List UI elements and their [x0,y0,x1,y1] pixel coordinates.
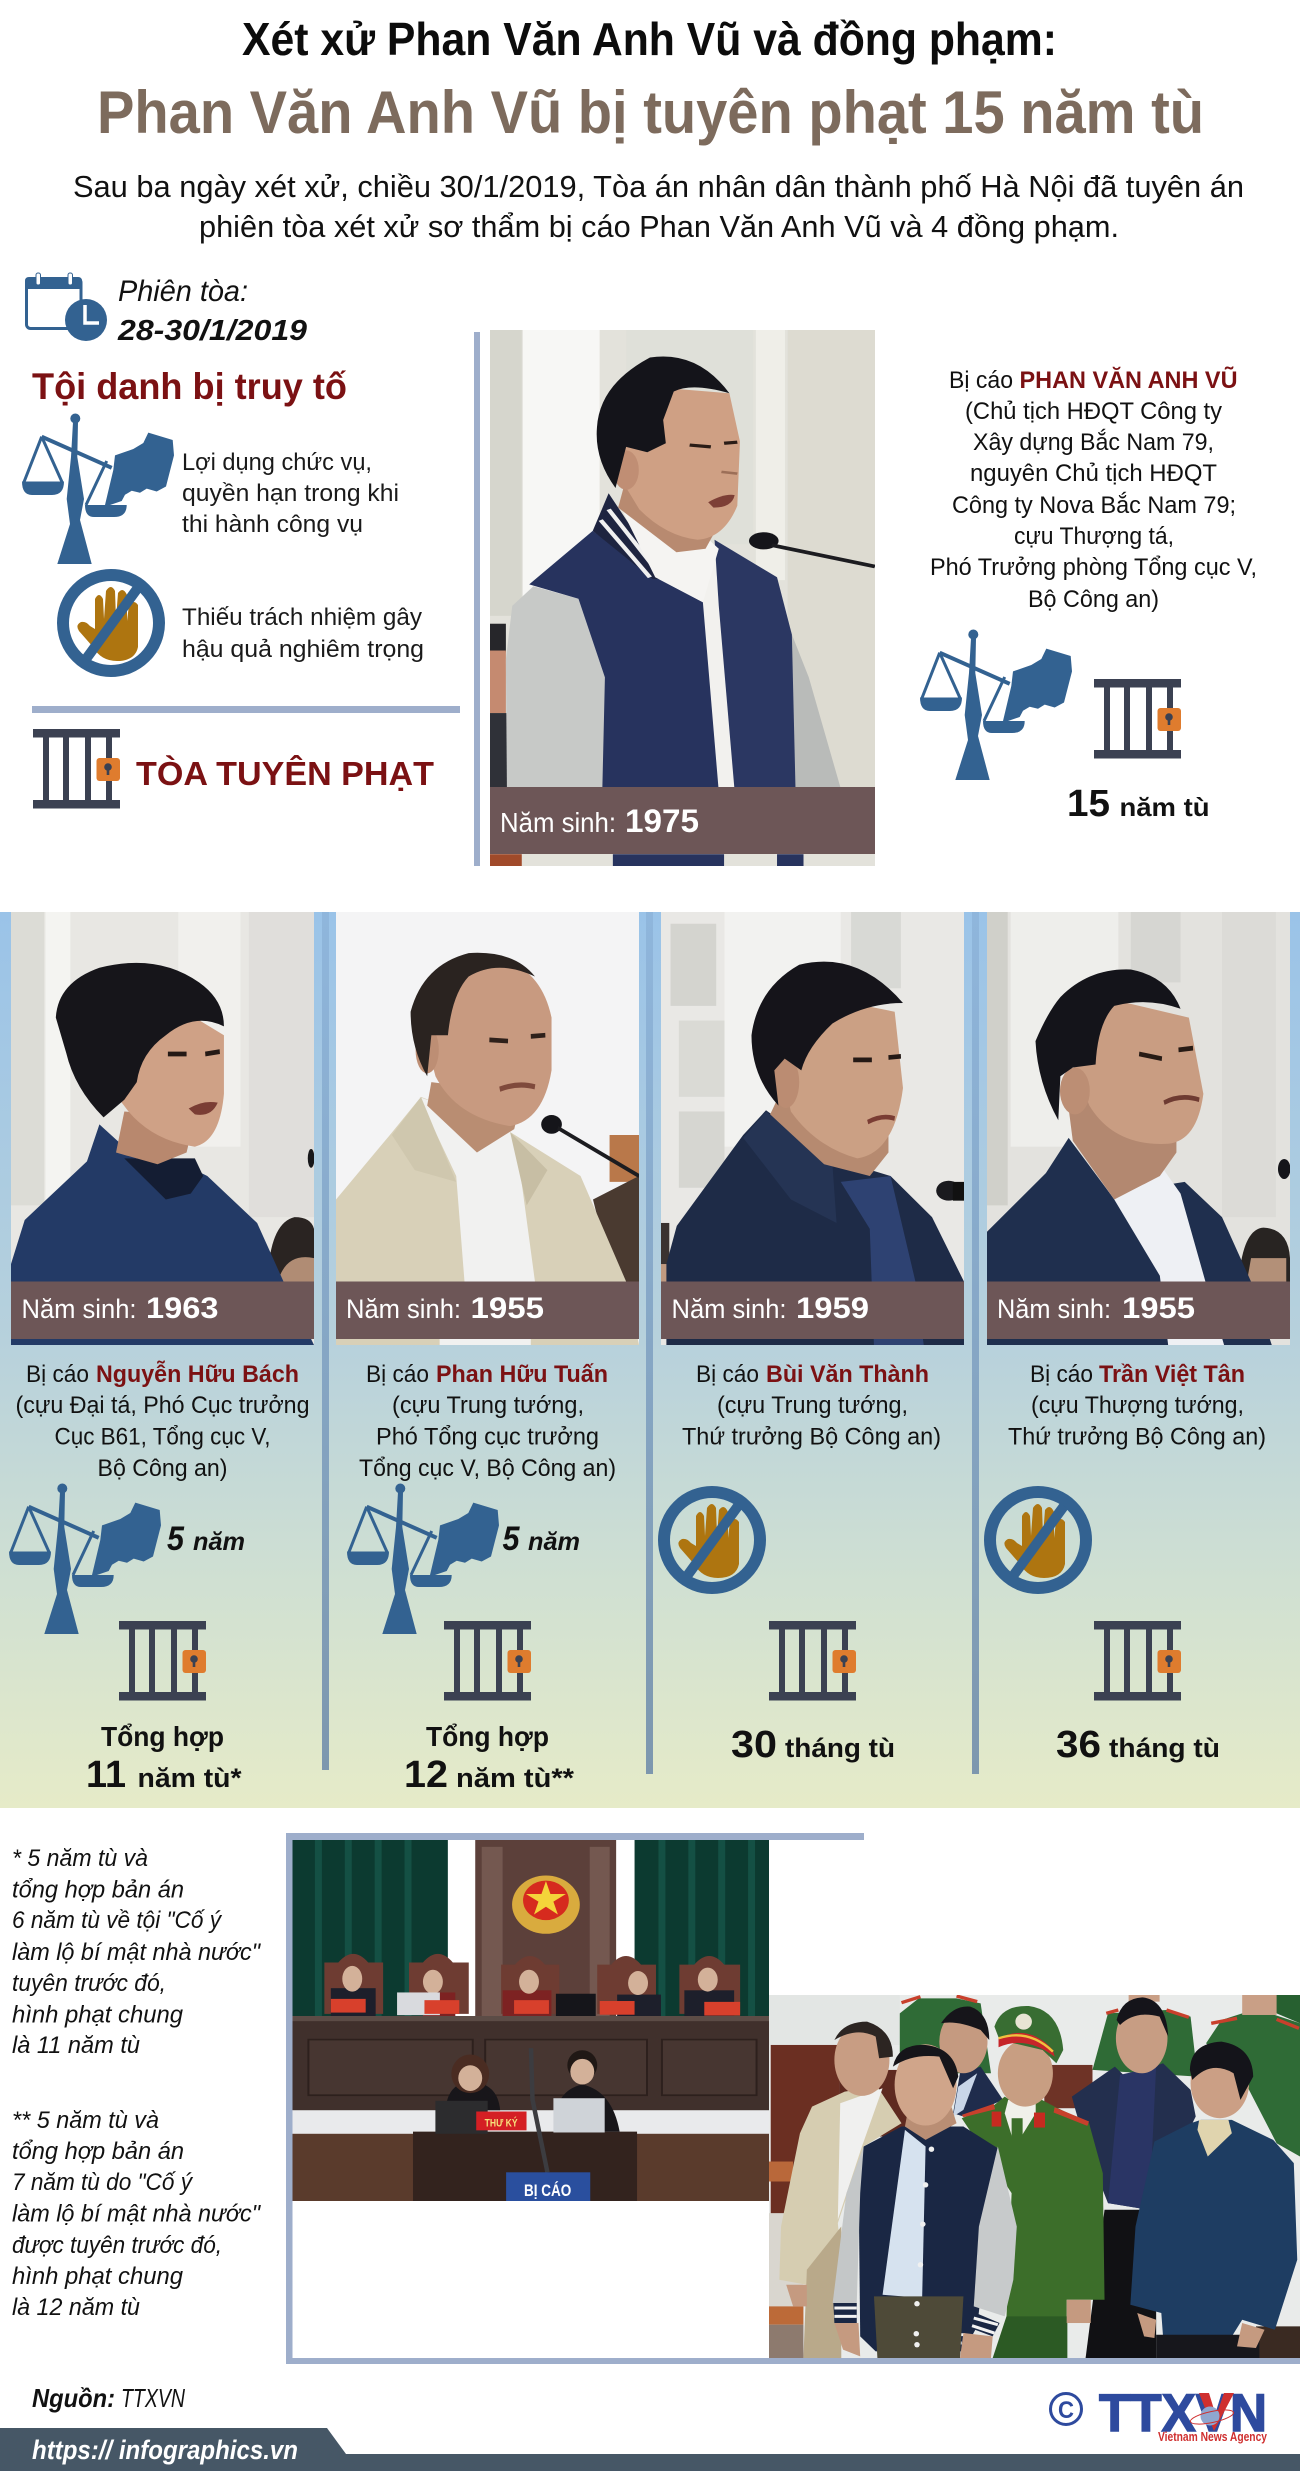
intro paragraph [73,169,1244,244]
icon: scales with hand [9,1484,161,1634]
footnote one: làm lộ bí mật nhà nước" [12,1939,261,1966]
icon: stop hand [63,575,159,671]
defendant description: cựu Thượng tá, [1014,523,1174,550]
total sentence: Tổng hợp [101,1721,224,1752]
footnote two: tổng hợp bản án [12,2138,184,2165]
website url: https:// infographics.vn [32,2435,298,2465]
icon: jail bars [33,729,120,808]
footnote two: là 12 năm tù [12,2294,140,2321]
icon: stop hand [990,1492,1086,1588]
session date: Phiên tòa: [118,275,248,308]
heading: charges: Tội danh bị truy tố [32,366,347,407]
footnote two: ** 5 năm tù và [12,2107,159,2134]
birth year band [490,787,875,854]
total sentence: tháng tù [1109,1733,1220,1763]
footnote one: * 5 năm tù và [12,1845,148,1872]
defendant description: PHAN VĂN ANH VŨ [1020,366,1238,394]
sign: clerk: THƯ KÝ [485,2115,518,2129]
footnote one: là 11 năm tù [12,2032,140,2059]
panel: main defendant photo [490,330,875,866]
charge sentence: 5 years: năm [193,1528,245,1556]
panel: photo frame [286,1833,1300,2364]
defendant description: (cựu Trung tướng, [392,1392,584,1419]
footnote two: hình phạt chung [12,2263,184,2290]
panel: left column charges [22,273,460,808]
charge sentence: 5 years [502,1520,580,1558]
panel: Bùi Văn Thành [661,912,964,1766]
birth year band: Năm sinh: [346,1294,461,1324]
icon: calendar and clock [25,273,107,341]
defendant description: Trần Việt Tân [1099,1361,1245,1388]
footnote one: hình phạt chung [12,2002,184,2028]
defendant description [930,366,1257,613]
panel: Phan Hữu Tuấn [336,912,639,1796]
total sentence [404,1721,575,1796]
sentence: 15 years: 15 [1067,783,1110,825]
total sentence: năm tù* [138,1763,242,1793]
total sentence: 30 [731,1724,777,1766]
charge sentence: 5 years: 5 [167,1520,185,1558]
intro paragraph: phiên tòa xét xử sơ thẩm bị cáo Phan Văn Anh Vũ và 4 đồng phạm. [199,209,1119,244]
footnotes [12,1845,261,2321]
total sentence: Tổng hợp [426,1721,549,1752]
defendant description: Thứ trưởng Bộ Công an) [682,1424,941,1450]
logo accent [1189,2393,1235,2431]
logo: TTXVN [1050,2384,1268,2444]
icon: jail bars [1094,1621,1181,1700]
icon: stop hand [664,1492,760,1588]
footnote one: 6 năm tù về tội "Cố ý [12,1907,223,1934]
heading: line two: Phan Văn Anh Vũ bị tuyên phạt 15 năm tù [97,79,1204,146]
birth year band: Năm sinh: [500,807,616,838]
footnote one [12,1845,261,2059]
source note: TTXVN [121,2383,185,2413]
birth year band [987,1282,1290,1339]
charge two text [182,604,424,663]
defendant description: Thứ trưởng Bộ Công an) [1008,1424,1266,1450]
defendant description: Bùi Văn Thành [766,1361,929,1388]
birth year band [11,1282,314,1339]
birth year band: Năm sinh: [997,1294,1111,1324]
charge one text: Lợi dụng chức vụ, [182,449,372,476]
icon: jail bars [1094,679,1181,758]
icon: scales with hand [347,1484,499,1634]
charge sentence: 5 years [167,1520,245,1558]
intro paragraph: Sau ba ngày xét xử, chiều 30/1/2019, Tòa án nhân dân thành phố Hà Nội đã tuyên án [73,169,1244,204]
defendant description: Bộ Công an) [98,1455,228,1482]
birth year band: 1963 [146,1292,218,1325]
birth year band: 1975 [625,803,699,839]
panel: main defendant details [920,366,1257,825]
footnote two: được tuyên trước đó, [12,2232,222,2259]
sign: clerk [476,2111,527,2130]
total sentence: 12 [404,1754,448,1796]
charge one text: quyền hạn trong khi [182,480,399,507]
icon: jail bars [119,1621,206,1700]
source note [32,2383,185,2413]
defendant description: Bị cáo [26,1361,89,1388]
total sentence: 11 [86,1754,126,1796]
photo: Phan Văn Anh Vũ [490,330,875,866]
charge two text: hậu quả nghiêm trọng [182,636,424,663]
photo: Nguyễn Hữu Bách [11,912,314,1345]
source note: Nguồn: [32,2383,115,2413]
defendant description [682,1361,941,1450]
panel: Trần Việt Tân [987,912,1290,1766]
defendant description [16,1360,310,1482]
footnote two [12,2107,261,2321]
charge one text [182,449,399,538]
photo: defendants standing [769,1995,1300,2358]
panel: co-defendants background [0,912,1300,1808]
birth year band [336,1282,639,1339]
total sentence [86,1721,242,1796]
defendant description: Bị cáo [1030,1361,1093,1388]
birth year band: Năm sinh: [672,1294,786,1324]
defendant description: Tổng cục V, Bộ Công an) [359,1455,616,1482]
defendant description: Bị cáo [949,367,1013,394]
defendant description: Bị cáo [696,1361,759,1388]
charge sentence: 5 years: 5 [502,1520,520,1558]
defendant description: Xây dựng Bắc Nam 79, [973,429,1214,456]
defendant description [1008,1361,1266,1450]
defendant description: (cựu Thượng tướng, [1031,1392,1244,1419]
icon: jail bars [444,1621,531,1700]
birth year band: 1959 [796,1292,869,1325]
defendant description [359,1361,616,1482]
session date [117,275,307,347]
defendant description: Bị cáo [366,1361,429,1388]
birth year band [661,1282,964,1339]
sign: defendant: BỊ CÁO [524,2180,571,2200]
heading: line one: Xét xử Phan Văn Anh Vũ và đồng phạm: [242,13,1057,65]
total sentence [1056,1724,1220,1766]
session date: 28-30/1/2019 [117,315,307,347]
footer bar [0,2428,1300,2471]
photo: Bùi Văn Thành [661,912,964,1345]
defendant description: Nguyễn Hữu Bách [96,1360,299,1388]
total sentence: tháng tù [785,1733,895,1763]
birth year band: 1955 [1122,1292,1195,1325]
sign: defendant [506,2172,590,2201]
photo: Phan Hữu Tuấn [336,912,639,1345]
defendant description: Công ty Nova Bắc Nam 79; [952,492,1236,519]
total sentence [731,1724,895,1766]
total sentence: 36 [1056,1724,1101,1766]
wordmark: TTXVN [1099,2384,1267,2443]
birth year band: Năm sinh: [22,1294,136,1324]
heading: sentence: TÒA TUYÊN PHẠT [136,755,434,792]
copyright mark: C [1058,2397,1074,2424]
total sentence: năm tù** [456,1763,575,1793]
icon: scales with hand [22,414,174,564]
defendant description: Bộ Công an) [1028,586,1159,613]
agency name: Vietnam News Agency [1158,2429,1268,2444]
sentence: 15 years: năm tù [1120,792,1210,822]
footnote two: làm lộ bí mật nhà nước" [12,2200,261,2228]
panel: Nguyễn Hữu Bách [9,912,314,1796]
birth year band: 1955 [470,1292,544,1325]
defendant description: (cựu Đại tá, Phó Cục trưởng [16,1392,310,1419]
defendant description: (Chủ tịch HĐQT Công ty [965,398,1222,425]
footnote two: 7 năm tù do "Cố ý [12,2169,194,2196]
footnote one: tuyên trước đó, [12,1970,166,1997]
charge two text: Thiếu trách nhiệm gây [182,604,422,631]
defendant description: Phó Trưởng phòng Tổng cục V, [930,554,1257,581]
sentence: 15 years [1067,783,1210,825]
icon: jail bars [769,1621,856,1700]
title block [97,13,1204,146]
defendant description: Phan Hữu Tuấn [436,1361,608,1388]
defendant description: Cục B61, Tổng cục V, [54,1424,270,1450]
charge sentence: 5 years: năm [528,1528,580,1556]
defendant description: nguyên Chủ tịch HĐQT [970,460,1217,487]
photo: courtroom [292,1840,769,2201]
charge one text: thi hành công vụ [182,511,363,538]
icon: scales with hand [920,630,1072,780]
defendant description: (cựu Trung tướng, [717,1392,908,1419]
footnote one: tổng hợp bản án [12,1876,184,1904]
photo: Trần Việt Tân [987,912,1290,1345]
copyright mark [1050,2394,1082,2424]
defendant description: Phó Tổng cục trưởng [376,1424,599,1450]
